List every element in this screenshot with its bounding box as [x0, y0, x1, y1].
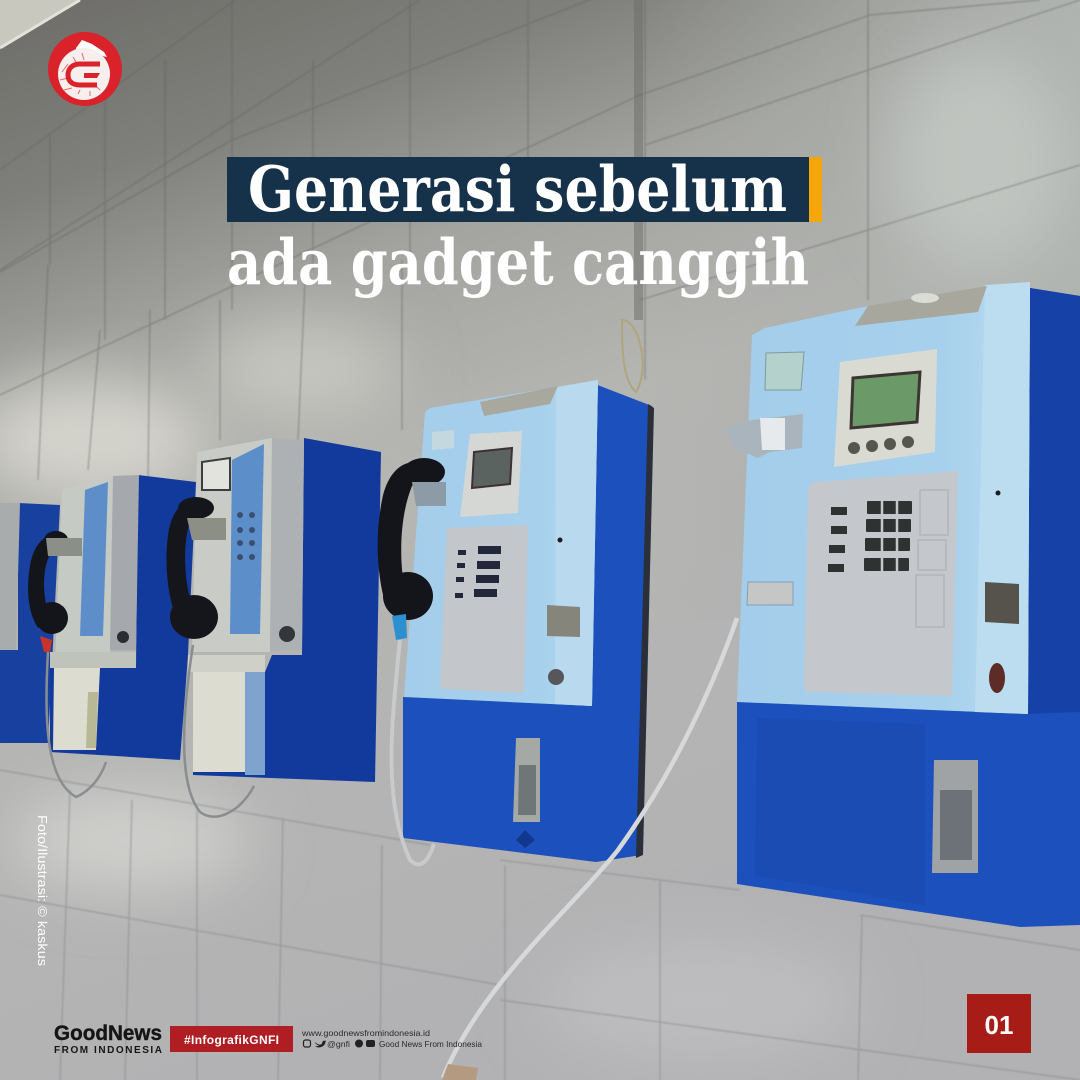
- footer: website and socials: www.goodnewsfromindonesia.id: [301, 1028, 430, 1038]
- icon: twitter: [315, 1040, 326, 1047]
- handset: [28, 531, 68, 634]
- title bar navy: [227, 157, 809, 222]
- logo: [48, 32, 122, 106]
- long steel phone cord: [443, 618, 737, 1078]
- footer: hashtag badge: #InfografikGNFI: [184, 1033, 279, 1047]
- phone 3: [378, 380, 654, 864]
- phone 2: [166, 438, 381, 817]
- phone 1: [28, 475, 196, 797]
- title: [227, 152, 822, 299]
- icon: youtube: [366, 1040, 375, 1047]
- title line 2: ada gadget canggih: [227, 225, 809, 299]
- footer: GoodNews brand: GoodNews: [54, 1022, 162, 1045]
- cord end plug: [442, 1064, 478, 1080]
- page number badge: 01: [985, 1010, 1013, 1040]
- page number badge: [967, 994, 1031, 1053]
- title line 1: Generasi sebelum: [248, 152, 787, 226]
- icon: facebook: [355, 1040, 363, 1048]
- icon: instagram: [304, 1040, 310, 1047]
- photo credit: Foto/Ilustrasi: © kaskus: [35, 815, 49, 966]
- footer: website and socials: @gnfi: [327, 1039, 350, 1049]
- footer: GoodNews brand: FROM INDONESIA: [54, 1045, 162, 1056]
- phone 4 (foreground): [724, 282, 1080, 927]
- handset: [378, 458, 445, 620]
- footer: hashtag badge: [170, 1026, 293, 1052]
- footer: website and socials: Good News From Indonesia: [379, 1039, 482, 1049]
- title bar amber accent: [809, 157, 822, 222]
- phone 0 (cut off at left edge): [0, 503, 60, 743]
- handset: [166, 497, 218, 639]
- footer: GoodNews brand: [54, 1022, 162, 1056]
- phone 3 coin box: [513, 738, 540, 848]
- footer: website and socials: [301, 1028, 482, 1049]
